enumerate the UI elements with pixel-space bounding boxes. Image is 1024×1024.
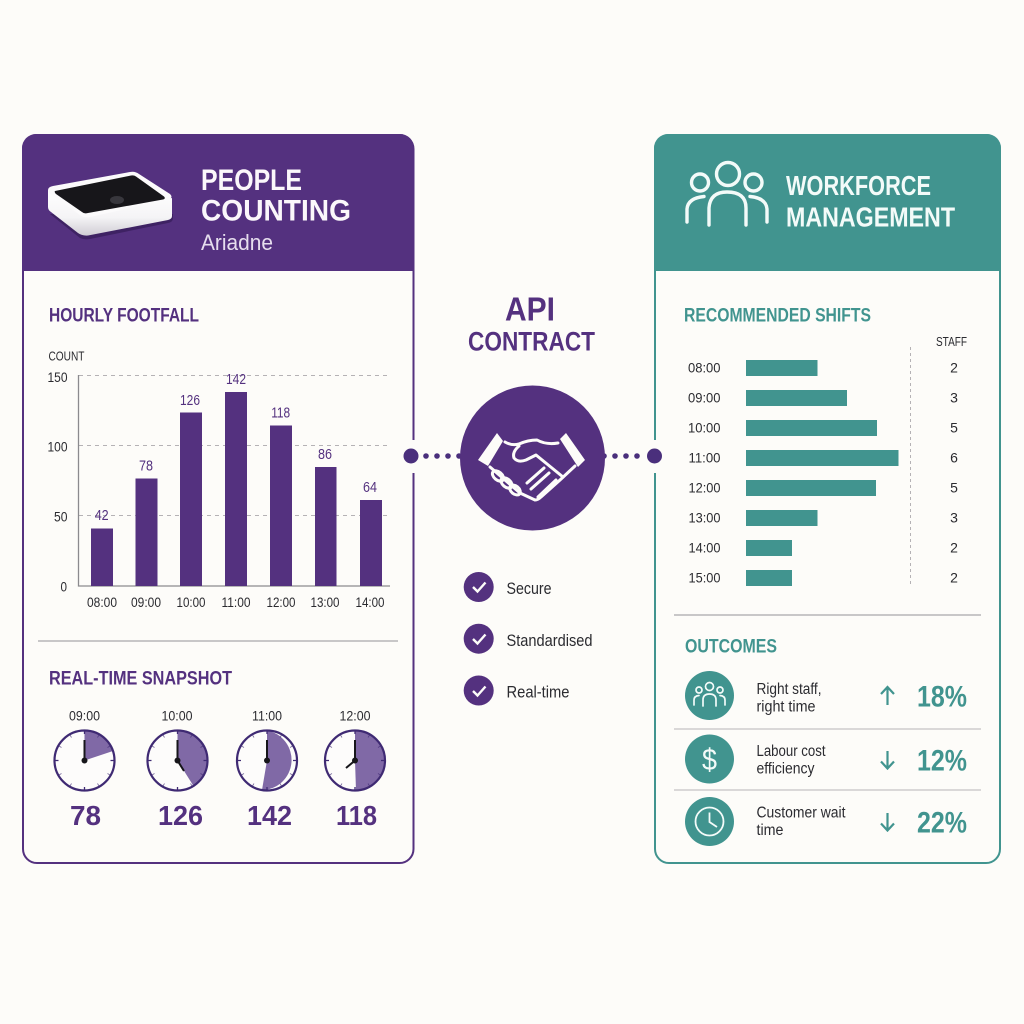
list item: real-time: [464, 676, 570, 706]
bar value labels: 142: [226, 372, 246, 388]
heading: api contract: [468, 291, 595, 357]
bar chart: hourly footfall: 50: [54, 510, 68, 524]
value: 142: 142: [247, 800, 292, 831]
panel: workforce management: [654, 134, 1001, 863]
time axis labels: 11:00: [222, 595, 250, 610]
heading: people counting: PEOPLE: [201, 164, 302, 197]
outcome: right staff, right time: Right staff,: [756, 681, 822, 698]
shift time labels: 08:00: [688, 360, 721, 376]
outcome: labour cost efficiency: efficiency: [756, 760, 815, 778]
clock: 11:00: [237, 709, 297, 790]
staff counts: 3: [950, 390, 958, 406]
shift time labels: [688, 360, 721, 586]
time axis labels: 09:00: [131, 595, 161, 610]
bar value labels: 42: [95, 508, 109, 524]
subheading: Ariadne: Ariadne: [201, 230, 273, 255]
shift bars: [746, 360, 898, 586]
bar chart: hourly footfall: 0: [60, 580, 67, 594]
panel: people counting: [22, 134, 414, 863]
list item: standardised: Standardised: [506, 631, 592, 650]
time axis labels: 12:00: [266, 595, 296, 610]
clock: 12:00: [325, 709, 385, 790]
bar value labels: 118: [271, 406, 290, 422]
list item: secure: [464, 572, 552, 602]
heading: people counting: COUNTING: [201, 194, 351, 228]
clock: 12:00: 12:00: [340, 709, 370, 724]
clock: 11:00: 11:00: [252, 709, 282, 724]
outcome: customer wait time: 22%: [917, 806, 967, 840]
shift time labels: 09:00: [688, 390, 721, 406]
heading: people counting: [201, 164, 351, 228]
staff counts: [950, 360, 958, 586]
list item: standardised: [464, 624, 592, 654]
list item: real-time: Real-time: [506, 683, 570, 702]
panel header: people counting: [22, 134, 414, 271]
value: 118: 118: [336, 800, 377, 831]
bars: [91, 392, 382, 586]
heading: workforce management: [786, 170, 955, 232]
shift time labels: 14:00: [688, 540, 721, 556]
staff counts: 5: [950, 420, 958, 436]
outcome: right staff, right time: [685, 671, 967, 720]
heading: recommended shifts: RECOMMENDED SHIFTS: [684, 304, 871, 326]
shift time labels: 10:00: [688, 420, 721, 436]
icon: three people: [687, 162, 767, 225]
heading: api contract: API: [505, 291, 555, 328]
bar value labels: 64: [363, 480, 377, 496]
outcome: labour cost efficiency: [685, 734, 967, 784]
outcome: labour cost efficiency: Labour cost: [756, 743, 826, 760]
staff counts: 3: [950, 510, 958, 526]
connector: right dotted line: [601, 448, 662, 464]
time axis labels: 10:00: [176, 595, 206, 610]
clock: 10:00: [148, 709, 208, 790]
bar value labels: [95, 372, 377, 524]
heading: workforce management: WORKFORCE: [786, 170, 931, 201]
connector: left dotted line: [404, 448, 462, 464]
icon: people counting sensor device: [48, 172, 173, 239]
panel header: workforce management: [654, 134, 1001, 271]
bar chart: hourly footfall: COUNT: [48, 350, 85, 364]
heading: api contract: CONTRACT: [468, 327, 595, 357]
staff counts: 5: [950, 480, 958, 496]
heading: hourly footfall: HOURLY FOOTFALL: [49, 304, 199, 326]
shift time labels: 15:00: [688, 570, 721, 586]
staff counts: 2: [950, 570, 958, 586]
bar value labels: 126: [180, 393, 200, 409]
bar value labels: 78: [139, 458, 153, 474]
bar value labels: 86: [318, 447, 332, 463]
bar chart: hourly footfall: [48, 350, 390, 610]
clock: 10:00: 10:00: [162, 709, 192, 724]
time axis labels: 08:00: [87, 595, 117, 610]
outcome: right staff, right time: right time: [756, 698, 816, 716]
staff counts: 2: [950, 540, 958, 556]
shift time labels: 13:00: [688, 510, 721, 526]
outcome: customer wait time: time: [756, 822, 784, 839]
time axis labels: 13:00: [310, 595, 340, 610]
outcome: right staff, right time: 18%: [917, 680, 967, 714]
chart: recommended shifts: [688, 335, 967, 586]
outcome: customer wait time: [685, 797, 967, 846]
value: 126: 126: [158, 800, 203, 831]
heading: real-time snapshot: REAL-TIME SNAPSHOT: [49, 668, 232, 690]
bar chart: hourly footfall: 150: [48, 370, 68, 385]
icon: handshake: [460, 386, 605, 530]
heading: outcomes: OUTCOMES: [685, 636, 777, 658]
shift time labels: 11:00: [688, 450, 721, 466]
value: 78: 78: [70, 800, 101, 831]
staff counts: 2: [950, 360, 958, 376]
clock: 09:00: 09:00: [69, 709, 100, 724]
shift time labels: 12:00: [688, 480, 721, 496]
clock: 09:00: [54, 709, 114, 790]
outcome: labour cost efficiency: 12%: [917, 744, 967, 778]
staff counts: 6: [950, 450, 958, 466]
list item: secure: Secure: [506, 579, 552, 598]
bar chart: hourly footfall: 100: [48, 440, 68, 454]
chart: recommended shifts: STAFF: [936, 335, 967, 349]
outcome: customer wait time: Customer wait: [756, 804, 846, 822]
heading: workforce management: MANAGEMENT: [786, 202, 955, 232]
time axis labels: 14:00: [356, 595, 384, 610]
time axis labels: [87, 595, 384, 610]
outcome: labour cost efficiency: $: [702, 742, 717, 777]
